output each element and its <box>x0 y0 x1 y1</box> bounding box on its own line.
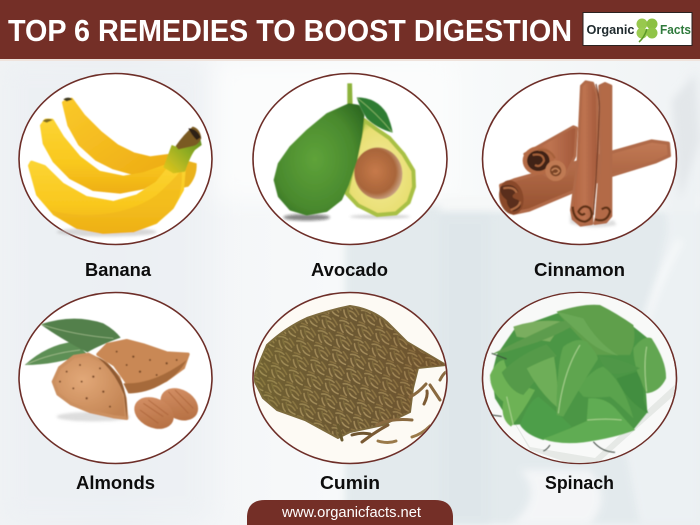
label: Spinach: Spinach <box>545 473 614 493</box>
title: TOP 6 REMEDIES TO BOOST DIGESTION <box>8 13 572 48</box>
header banner <box>0 0 700 61</box>
illustration: cumin seed pile <box>253 306 446 442</box>
circle frame <box>482 292 676 464</box>
whole avocado <box>347 83 353 107</box>
icon: clover <box>636 18 658 42</box>
illustration: cinnamon sticks <box>496 82 669 227</box>
illustration: almonds and leaves <box>25 319 204 435</box>
logo: Organic Facts <box>583 12 692 46</box>
label: Banana: Banana <box>85 260 152 280</box>
upright pair of sticks <box>571 82 598 225</box>
footer tab with website <box>247 500 453 525</box>
panel: cinnamon <box>482 74 676 244</box>
panel: avocado <box>253 74 447 244</box>
leaves <box>25 342 87 365</box>
circle frame <box>253 74 447 244</box>
shell speckles <box>59 351 178 408</box>
panel: cumin <box>253 292 447 464</box>
label: Cumin: Cumin <box>320 473 380 493</box>
circle frame <box>253 292 447 464</box>
loose cumin seeds <box>338 372 446 442</box>
label: Cinnamon: Cinnamon <box>534 260 625 280</box>
leaf <box>357 97 393 133</box>
avocado half <box>347 120 414 215</box>
long diagonal stick <box>501 141 669 213</box>
logo: Organic Facts: Facts <box>660 22 691 37</box>
panel: spinach <box>482 292 680 470</box>
label: Almonds: Almonds <box>76 473 155 493</box>
label: Avocado: Avocado <box>311 260 388 280</box>
almond kernels <box>155 382 204 427</box>
panel: banana <box>19 74 212 244</box>
illustration: spinach leaves <box>490 305 666 452</box>
short stick <box>525 127 577 180</box>
footer tab with website: www.organicfacts.net <box>281 505 421 521</box>
circle frame <box>19 292 212 464</box>
pit <box>349 143 407 204</box>
circle frame <box>19 74 212 244</box>
almond shell left <box>53 354 127 418</box>
illustration: avocado <box>276 83 414 221</box>
logo: Organic Facts: Organic <box>586 22 634 37</box>
illustration: banana bunch <box>30 98 202 237</box>
circle frame <box>482 74 676 244</box>
plate <box>483 292 680 470</box>
almond shell right <box>98 341 188 392</box>
panel: almonds <box>19 292 212 464</box>
